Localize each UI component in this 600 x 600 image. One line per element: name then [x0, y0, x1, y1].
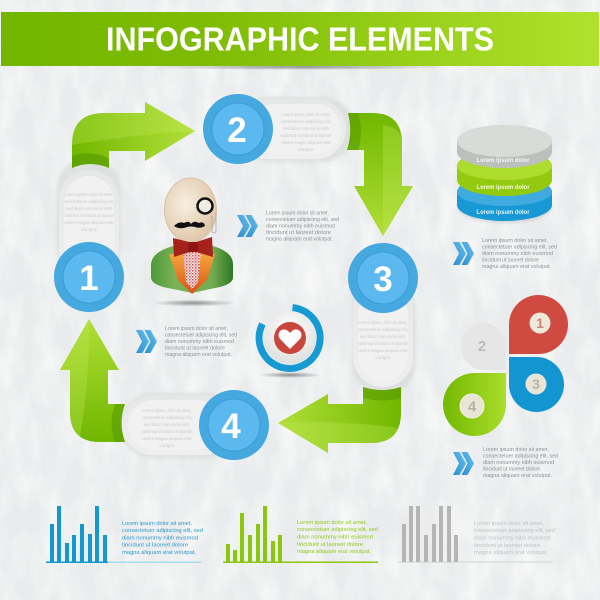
- text block: green chart: magna aliquam erat volutpat.: [297, 549, 371, 555]
- petal 2 grey: 2: [478, 338, 486, 355]
- text block: grey chart: Lorem ipsum dolor sit amet,: [474, 521, 545, 527]
- pill: step 1 text: Lorem ipsum dolor sit amet,: [64, 192, 114, 197]
- pill: step 4 text: sed diam nonummy nibh: [144, 422, 190, 427]
- text block: gentleman: tincidunt ut laoreet dolore: [266, 230, 331, 236]
- petal 4 green: 4: [468, 398, 477, 416]
- text block: centre left: diam nonummy nibh euismod: [165, 339, 234, 345]
- disc: blue layer: Lorem ipsum dolor: [476, 209, 530, 216]
- text block: discs: tincidunt ut laoreet dolore: [482, 258, 539, 264]
- text block: blue chart: tincidunt ut laoreet dolore: [122, 542, 188, 548]
- text block: gentleman: Lorem ipsum dolor sit amet,: [266, 210, 329, 216]
- arrow: 2 to 3: [347, 113, 413, 236]
- text block: discs: consectetuer adipiscing elit, sed: [482, 244, 557, 250]
- text block: grey chart: tincidunt ut laoreet dolore: [474, 543, 540, 549]
- chevrons: beside petals: [453, 452, 474, 475]
- petal 3 blue: [509, 357, 564, 412]
- text block: blue chart: diam nonummy nibh euismod: [122, 536, 198, 542]
- pill: step 2 text: Lorem ipsum dolor sit amet,: [282, 112, 330, 117]
- text block: green chart: consectetuer adipiscing elit, sed: [297, 527, 378, 533]
- pill: step 3 text: euismod tincidunt ut laoreet: [358, 341, 409, 346]
- badge 2: 2: [227, 111, 247, 150]
- text block: gentleman: diam nonummy nibh euismod: [266, 224, 335, 230]
- text block: centre left: tincidunt ut laoreet dolore: [165, 346, 225, 352]
- bar chart: grey: [398, 506, 553, 562]
- text block: blue chart: magna aliquam erat volutpat.: [122, 550, 196, 556]
- text block: petals: consectetuer adipiscing elit, sed: [483, 454, 558, 460]
- text block: discs: magna aliquam erat volutpat.: [482, 264, 551, 270]
- arrow: 4 to 1: [60, 319, 125, 442]
- pill: step 3 text: dolore magna aliquam erat: [358, 348, 408, 353]
- pill: step 1 text: [57, 158, 121, 278]
- petal 4 green: [443, 373, 506, 436]
- text block: gentleman: consectetuer adipiscing elit, sed: [266, 217, 339, 223]
- text block: blue chart: consectetuer adipiscing elit, sed: [122, 528, 203, 534]
- pill: step 3 text: volutpat.: [375, 355, 391, 360]
- pill: step 1 text: volutpat.: [81, 227, 97, 232]
- pill: step 2 text: consectetuer adipiscing elit,: [281, 119, 331, 124]
- text block: green chart: Lorem ipsum dolor sit amet,: [297, 520, 368, 526]
- text block: grey chart: [474, 521, 555, 556]
- chevrons: beside gentleman: [237, 215, 258, 237]
- icon: gentleman with monocle: [151, 178, 236, 306]
- petal 3 blue: 3: [532, 376, 540, 392]
- text block: centre left: [165, 326, 237, 358]
- text block: gentleman: [266, 210, 339, 242]
- pill: step 4 text: consectetuer adipiscing elit,: [142, 415, 192, 420]
- pill: step 3 text: consectetuer adipiscing elit,: [358, 327, 408, 332]
- badge 1: [54, 242, 124, 312]
- icon: heart progress ring: [258, 308, 322, 378]
- pill: step 4 text: volutpat.: [159, 443, 175, 448]
- pill: step 1 text: sed diam nonummy nibh: [66, 206, 112, 211]
- text block: petals: tincidunt ut laoreet dolore: [483, 466, 540, 472]
- pill: step 4 text: euismod tincidunt ut laoreet: [142, 429, 193, 434]
- pill: step 2 text: volutpat.: [298, 147, 314, 152]
- text block: petals: magna aliquam erat volutpat.: [483, 473, 552, 479]
- arrow: 1 to 2: [72, 102, 195, 168]
- chevrons: beside discs: [453, 242, 474, 265]
- disc: green layer: Lorem ipsum dolor: [476, 184, 530, 191]
- text block: discs: diam nonummy nibh euismod: [482, 251, 553, 257]
- badge 1: 1: [79, 259, 99, 298]
- badge 3: [348, 243, 418, 313]
- pill: step 3 text: Lorem ipsum dolor sit amet,: [358, 320, 408, 325]
- bar chart: green: [223, 506, 378, 563]
- disc: grey layer: Lorem ipsum dolor: [476, 157, 530, 164]
- text block: grey chart: diam nonummy nibh euismod: [474, 536, 550, 542]
- text block: petals: Lorem ipsum dolor sit amet,: [483, 447, 549, 453]
- stacked discs: [457, 125, 552, 223]
- pill: step 1 text: dolore magna aliquam erat: [64, 220, 114, 225]
- pill: step 2 text: sed diam nonummy nibh: [283, 126, 329, 131]
- text block: gentleman: magna aliquam erat volutpat.: [266, 236, 333, 242]
- bar chart: blue: [46, 506, 201, 563]
- pill: step 4 text: Lorem ipsum dolor sit amet,: [142, 408, 192, 413]
- text block: green chart: tincidunt ut laoreet dolore: [297, 542, 363, 548]
- title banner: INFOGRAPHIC ELEMENTS: [106, 20, 494, 58]
- text block: discs: [482, 238, 557, 270]
- chevrons: beside left text: [136, 330, 157, 353]
- pill: step 1 text: euismod tincidunt ut laoreet: [64, 213, 115, 218]
- text block: centre left: magna aliquam erat volutpat.: [165, 352, 232, 358]
- petal 1 red: [509, 295, 568, 354]
- petal 1 red: 1: [536, 315, 544, 331]
- pill: step 1 text: consectetuer adipiscing elit,: [64, 199, 114, 204]
- petal 2 grey: [461, 323, 506, 370]
- text block: discs: Lorem ipsum dolor sit amet,: [482, 238, 548, 244]
- badge 4: 4: [221, 407, 241, 446]
- text block: grey chart: magna aliquam erat volutpat.: [474, 550, 548, 556]
- text block: grey chart: consectetuer adipiscing elit, sed: [474, 528, 555, 534]
- text block: centre left: consectetuer adipiscing elit, sed: [165, 332, 237, 338]
- title banner: [1, 12, 599, 70]
- text block: petals: diam nonummy nibh euismod: [483, 460, 554, 466]
- pill: step 3 text: [352, 278, 416, 394]
- pill: step 2 text: euismod tincidunt ut laoreet: [280, 133, 332, 138]
- text block: green chart: diam nonummy nibh euismod: [297, 534, 373, 540]
- badge 3: 3: [373, 260, 393, 299]
- numbered petal diagram: [443, 295, 568, 436]
- pill: step 2 text: [238, 97, 354, 162]
- pill: step 4 text: [120, 393, 236, 458]
- pill: step 2 text: dolore magna aliquam erat: [282, 140, 331, 145]
- arrow: 3 to 4: [278, 387, 401, 453]
- text block: centre left: Lorem ipsum dolor sit amet,: [165, 326, 228, 332]
- text block: blue chart: Lorem ipsum dolor sit amet,: [122, 521, 193, 527]
- badge 4: [199, 390, 269, 460]
- pill: step 3 text: sed diam nonummy nibh: [360, 334, 406, 339]
- text block: petals: [483, 447, 558, 479]
- text block: blue chart: [122, 521, 203, 556]
- text block: green chart: [297, 520, 378, 555]
- badge 2: [203, 94, 273, 164]
- pill: step 4 text: dolore magna aliquam erat: [142, 436, 192, 441]
